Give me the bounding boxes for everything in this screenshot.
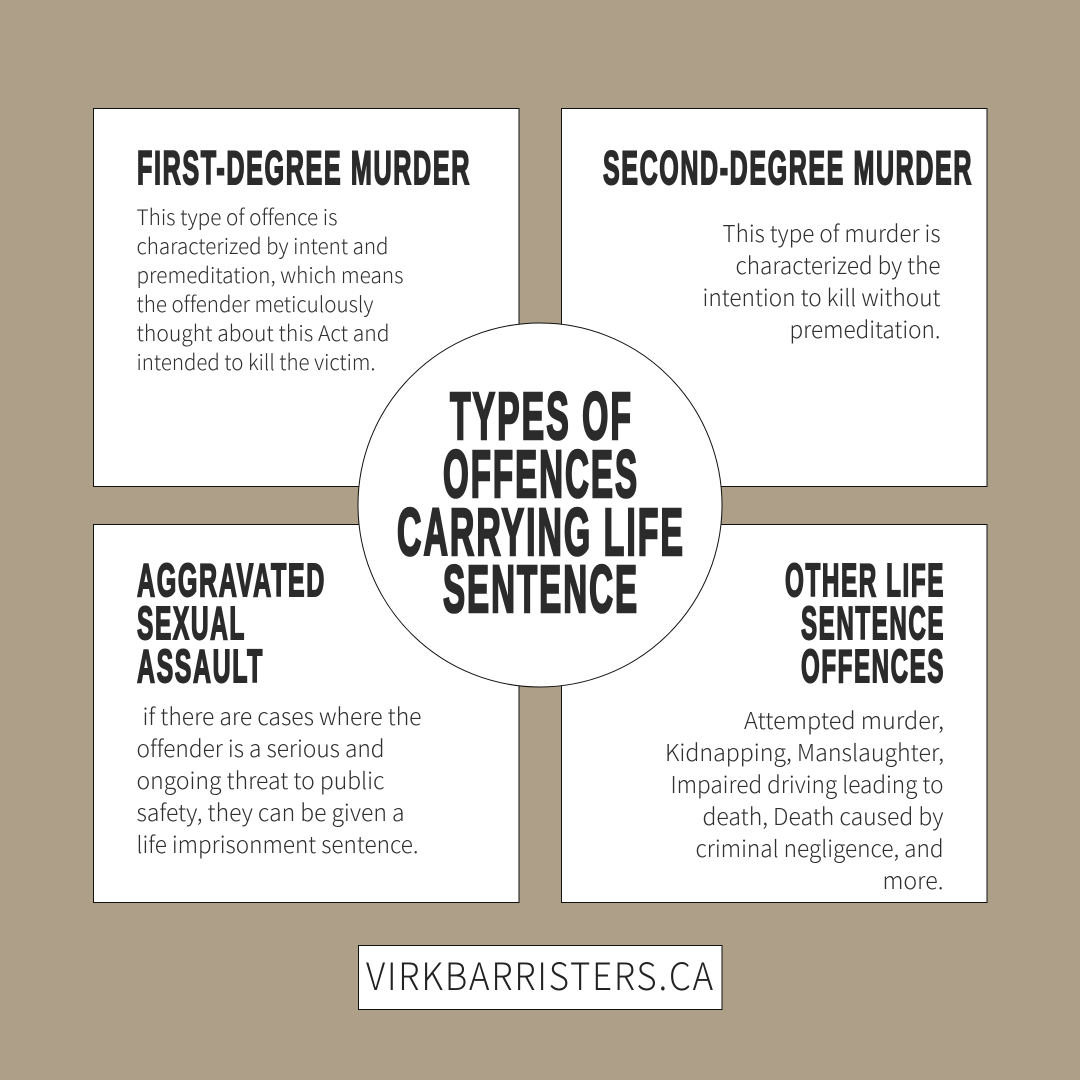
title: SENTENCE — [443, 552, 639, 627]
title — [397, 379, 685, 627]
title: CARRYING LIFE — [397, 495, 685, 570]
text block: second-degree description: premeditation. — [790, 311, 940, 345]
heading: aggravated sexual assault: ASSAULT — [137, 640, 264, 692]
heading: other life sentence offences: SENTENCE — [801, 597, 945, 649]
heading: first-degree murder: FIRST-DEGREE MURDER — [137, 141, 471, 194]
panel: other life sentence offences — [562, 524, 987, 902]
text block: second-degree description: intention to kill without — [702, 279, 940, 313]
text block: first-degree description: This type of offence is — [136, 201, 338, 232]
text block: other life sentence offences description: death, Death caused by — [702, 798, 944, 832]
text block: first-degree description: intended to kill the victim. — [136, 346, 376, 377]
footer: website label — [358, 946, 722, 1010]
title: TYPES OF — [450, 379, 633, 454]
text block: first-degree description: thought about this Act and — [136, 317, 390, 348]
text block: aggravated sexual assault description — [136, 698, 422, 860]
text block: aggravated sexual assault description: offender is a serious and — [136, 730, 384, 764]
heading: aggravated sexual assault: SEXUAL — [137, 597, 246, 649]
text block: other life sentence offences description — [665, 702, 944, 896]
text block: aggravated sexual assault description: safety, they can be given a — [136, 794, 404, 828]
panel: aggravated sexual assault — [94, 524, 519, 902]
text block: other life sentence offences description: criminal negligence, and — [696, 830, 944, 864]
text block: first-degree description: characterized by intent and — [136, 230, 388, 261]
text block: other life sentence offences description: more. — [882, 862, 944, 896]
text block: other life sentence offences description: Kidnapping, Manslaughter, — [665, 734, 944, 768]
text block: aggravated sexual assault description: if there are cases where the — [142, 698, 422, 732]
text block: second-degree description — [702, 215, 940, 345]
heading: other life sentence offences — [785, 554, 945, 692]
text block: first-degree description: premeditation, which means — [136, 259, 404, 290]
heading: other life sentence offences: OTHER LIFE — [785, 554, 945, 606]
center circle: main title — [358, 323, 722, 687]
heading: aggravated sexual assault — [137, 554, 326, 692]
text block: first-degree description — [136, 201, 404, 377]
text block: other life sentence offences description: Impaired driving leading to — [670, 766, 944, 800]
title: OFFENCES — [443, 437, 639, 512]
heading: other life sentence offences: OFFENCES — [801, 640, 945, 692]
text block: other life sentence offences description: Attempted murder, — [744, 702, 944, 736]
text block: second-degree description: This type of murder is — [722, 215, 940, 249]
text block: first-degree description: the offender meticulously — [136, 288, 374, 319]
text block: second-degree description: characterized by the — [736, 247, 940, 281]
text block: aggravated sexual assault description: ongoing threat to public — [136, 762, 384, 796]
panel: second-degree murder — [562, 108, 987, 486]
text block: aggravated sexual assault description: life imprisonment sentence. — [136, 826, 418, 860]
heading: aggravated sexual assault: AGGRAVATED — [137, 554, 326, 606]
panel: first-degree murder — [94, 108, 519, 486]
website text: VIRKBARRISTERS.CA — [366, 946, 715, 1001]
